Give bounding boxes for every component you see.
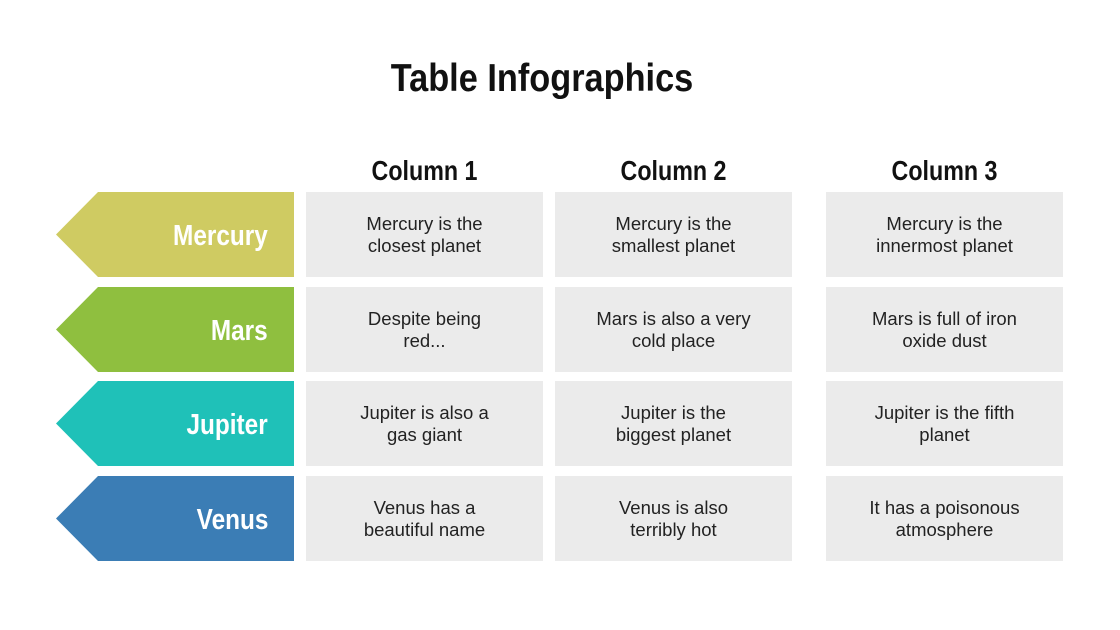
arrow: Mercury: Mercury: [173, 220, 268, 252]
cell: [306, 192, 543, 277]
cell: Despite being: [368, 308, 481, 328]
cell: oxide dust: [902, 330, 987, 350]
cell: innermost planet: [876, 234, 1013, 256]
cell: gas giant: [387, 424, 462, 444]
cell: Venus has a: [374, 496, 475, 518]
cell: [555, 381, 792, 466]
cell: cold place: [632, 330, 715, 350]
cell: planet: [919, 424, 970, 444]
arrow: Mars: [56, 287, 294, 372]
cell: atmosphere: [896, 518, 993, 540]
cell: Mars is full of iron: [872, 308, 1017, 328]
arrow: Jupiter: [56, 381, 294, 466]
cell: [826, 381, 1063, 466]
cell: [555, 476, 792, 561]
cell: terribly hot: [630, 518, 717, 540]
arrow: Mercury: [56, 192, 294, 277]
cell: [306, 287, 543, 372]
cell: Jupiter is the: [621, 402, 726, 422]
arrow: Venus: [56, 476, 294, 561]
cell: [555, 192, 792, 277]
title: Table Infographics: [391, 57, 693, 100]
cell: It has a poisonous: [869, 496, 1020, 518]
header: column 2: Column 2: [621, 155, 726, 186]
cell: Jupiter is the fifth: [875, 402, 1014, 422]
header: column 3: Column 3: [892, 155, 997, 186]
cell: [826, 476, 1063, 561]
cell: [826, 192, 1063, 277]
arrow: Venus: Venus: [196, 504, 268, 536]
cell: Venus is also: [619, 496, 728, 518]
arrow: Jupiter: Jupiter: [187, 409, 268, 441]
cell: smallest planet: [612, 234, 735, 256]
cell: [555, 287, 792, 372]
cell: closest planet: [368, 234, 481, 256]
header: column 1: Column 1: [372, 155, 477, 186]
cell: Mercury is the: [366, 212, 483, 234]
cell: red...: [403, 330, 446, 350]
cell: [306, 476, 543, 561]
cell: [306, 381, 543, 466]
cell: [826, 287, 1063, 372]
cell: Jupiter is also a: [360, 402, 489, 422]
cell: beautiful name: [364, 518, 485, 540]
arrow: Mars: Mars: [211, 315, 268, 347]
cell: Mars is also a very: [596, 308, 751, 328]
cell: Mercury is the: [886, 212, 1003, 234]
cell: biggest planet: [616, 424, 731, 444]
cell: Mercury is the: [615, 212, 732, 234]
